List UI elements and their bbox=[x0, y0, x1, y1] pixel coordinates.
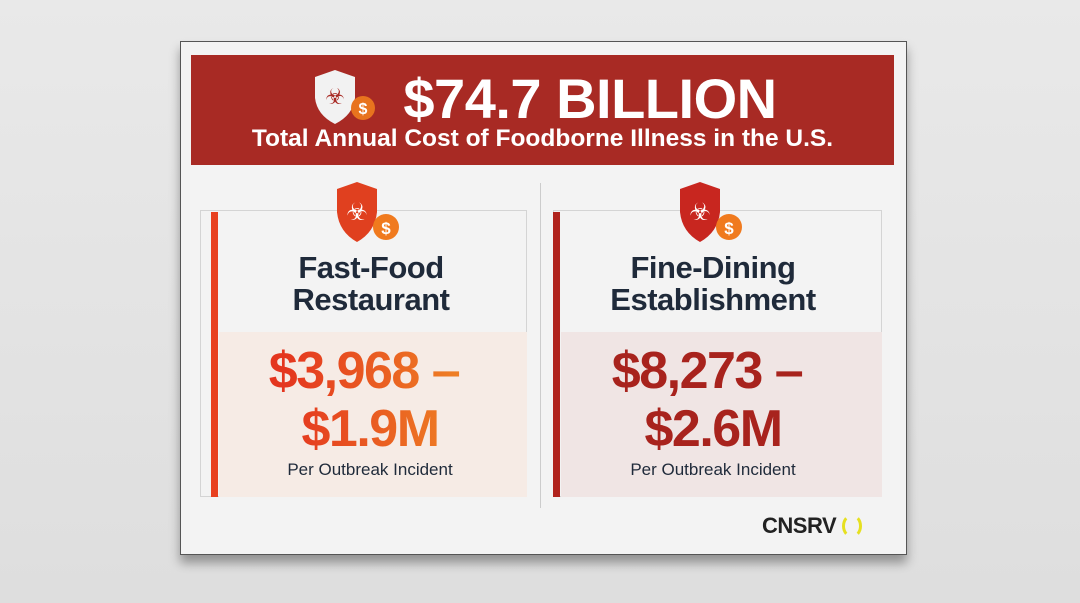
heading: fine-dining: Establishment bbox=[610, 282, 816, 317]
accent bar left bbox=[211, 212, 218, 497]
value: fast-food bbox=[200, 342, 540, 458]
heading: fast-food: Restaurant bbox=[293, 282, 449, 317]
heading: fast-food: Fast-Food bbox=[298, 250, 444, 285]
icon: left shield bbox=[337, 182, 399, 242]
center divider bbox=[540, 183, 541, 508]
accent bar right bbox=[553, 212, 560, 497]
header banner bbox=[191, 55, 894, 165]
title: $74.7 BILLION bbox=[403, 67, 777, 130]
icon: right shield: ☣ bbox=[689, 199, 711, 226]
icon: header shield: ☣ bbox=[325, 84, 345, 109]
icon: left shield: $ bbox=[381, 219, 391, 238]
icon: right shield: $ bbox=[724, 219, 734, 238]
heading: fine-dining: Fine-Dining bbox=[630, 250, 795, 285]
heading: fast-food bbox=[293, 250, 450, 317]
value: fine-dining bbox=[612, 342, 802, 458]
icon: header shield: $ bbox=[359, 101, 368, 118]
value: fine-dining: $8,273 – bbox=[612, 342, 802, 400]
value area bbox=[219, 332, 527, 497]
panel: fast-food bbox=[200, 210, 527, 497]
logo: CNSRV bbox=[762, 513, 836, 538]
icon: left shield: ☣ bbox=[346, 199, 368, 226]
value area bbox=[561, 332, 882, 497]
caption right: Per Outbreak Incident bbox=[630, 460, 796, 479]
icon: right shield bbox=[680, 182, 742, 242]
panel: fine-dining bbox=[553, 210, 882, 497]
caption left: Per Outbreak Incident bbox=[287, 460, 453, 479]
subtitle: Total Annual Cost of Foodborne Illness in the U.S. bbox=[252, 125, 833, 152]
icon: header shield bbox=[315, 70, 375, 124]
card bbox=[180, 41, 907, 555]
heading: fine-dining bbox=[610, 250, 816, 317]
value: fine-dining: $2.6M bbox=[644, 400, 782, 458]
